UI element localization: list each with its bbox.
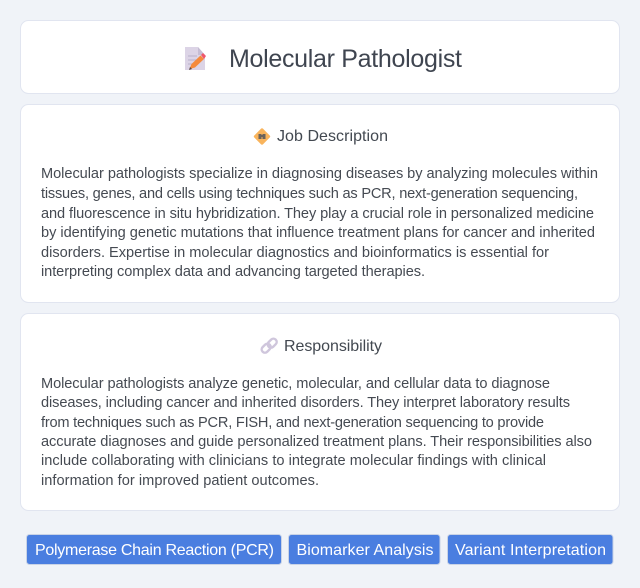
text block: responsibility: accurate diagnoses and guide personalized treatment plans. Their responsibilities also [41, 434, 592, 450]
text block: responsibility: information for improved patient outcomes. [41, 473, 319, 489]
tag: variant interpretation [448, 534, 613, 564]
text block: responsibility: include collaborating with clinicians to integrate molecular findings with clinical [41, 453, 546, 469]
text block: job description: and fluorescence in situ hybridization. They play a crucial role in personalized medicine [41, 206, 594, 222]
panel: job description [20, 104, 620, 302]
heading: job description: Job Description [277, 128, 388, 145]
text block: responsibility: from techniques such as PCR, FISH, and next-generation sequencing to provide [41, 415, 544, 431]
icon: orange diamond [253, 128, 271, 145]
text block: responsibility [41, 376, 592, 489]
text block: job description: disorders. Expertise in molecular diagnostics and bioinformatics is essential for [41, 245, 549, 261]
text block: job description: tissues, genes, and cells using techniques such as PCR, next-generation sequencing, [41, 186, 578, 202]
title: Molecular Pathologist [229, 45, 462, 73]
icon: document with pencil [185, 47, 206, 70]
panel: title card [20, 20, 620, 94]
heading: responsibility: Responsibility [284, 338, 382, 355]
tag: PCR [26, 534, 282, 564]
tag: biomarker analysis: Biomarker Analysis [296, 542, 434, 559]
panel: responsibility [20, 314, 620, 510]
tag: PCR: Polymerase Chain Reaction (PCR) [35, 542, 274, 559]
tag: variant interpretation: Variant Interpretation [455, 542, 606, 559]
icon: chain link [260, 337, 278, 354]
tag: biomarker analysis [288, 534, 440, 564]
text block: responsibility: Molecular pathologists analyze genetic, molecular, and cellular data to diagnose [41, 376, 550, 392]
text block: job description [41, 166, 598, 280]
text block: job description: Molecular pathologists specialize in diagnosing diseases by analyzing molecules within [41, 166, 598, 182]
text block: job description: interpreting complex data and advancing targeted therapies. [41, 264, 425, 280]
text block: responsibility: diseases, including cancer and inherited disorders. They interpret laboratory results [41, 395, 570, 411]
text block: job description: by identifying genetic mutations that influence treatment plans for cancer and inherited [41, 225, 595, 241]
